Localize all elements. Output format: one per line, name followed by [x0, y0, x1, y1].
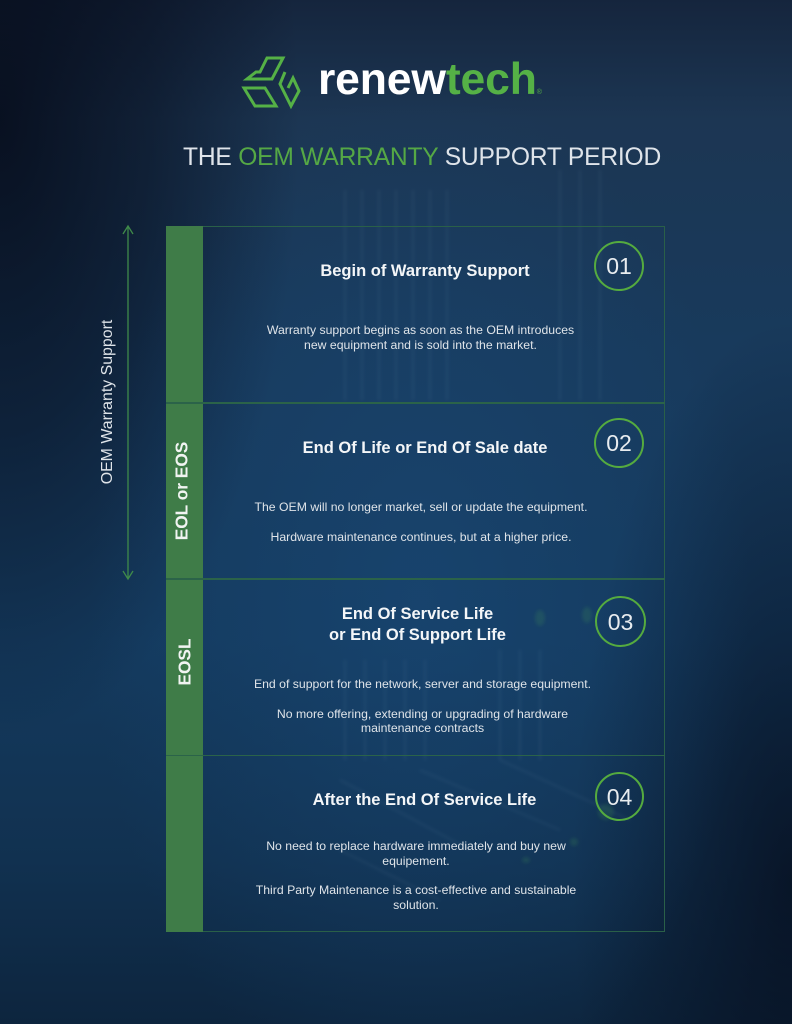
text 04: Third Party Maintenance is a cost-effective and sustainable [256, 883, 576, 897]
text 04: equipement. [382, 854, 450, 868]
number badge 01: 01 [606, 253, 632, 279]
heading 03 [329, 605, 506, 644]
text 03 [254, 677, 591, 735]
logo [241, 55, 542, 110]
panel: 01 begin of warranty support [266, 241, 644, 352]
text 01 [266, 323, 574, 352]
panel: 04 after end of service life [256, 772, 644, 912]
text 01: new equipment and is sold into the market. [304, 338, 537, 352]
number badge 02: 02 [606, 430, 632, 456]
text 03: No more offering, extending or upgrading of hardware [277, 707, 568, 721]
text 04 [256, 839, 576, 912]
number badge 03: 03 [608, 609, 633, 635]
title: THE OEM WARRANTY SUPPORT PERIOD [183, 144, 661, 171]
number badge 04 [595, 772, 644, 821]
text 02 [254, 500, 587, 544]
sidebar label: EOSL: EOSL [174, 638, 194, 686]
text 04: No need to replace hardware immediately and buy new [266, 839, 566, 853]
text 03: End of support for the network, server and storage equipment. [254, 677, 591, 691]
panel: green sidebar [166, 226, 203, 932]
label: OEM Warranty Support: OEM Warranty Support [99, 320, 116, 484]
heading 02: End Of Life or End Of Sale date [303, 439, 547, 457]
panel: 02 end of life [254, 418, 644, 544]
wordmark: renewtech® [318, 55, 542, 104]
heading 03: End Of Service Life [342, 605, 493, 623]
text 02: Hardware maintenance continues, but at a higher price. [270, 530, 571, 544]
panel: 03 end of service life [254, 596, 646, 735]
heading 03: or End Of Support Life [329, 626, 506, 644]
arrow: OEM warranty support span [122, 225, 134, 580]
sidebar label: EOL or EOS: EOL or EOS [172, 442, 192, 540]
text 04: solution. [393, 898, 439, 912]
heading 04: After the End Of Service Life [313, 791, 536, 809]
number badge 04: 04 [607, 784, 632, 810]
number badge 02 [594, 418, 644, 468]
text 02: The OEM will no longer market, sell or update the equipment. [255, 500, 587, 514]
number badge 03 [595, 596, 646, 647]
text 01: Warranty support begins as soon as the OEM introduces [267, 323, 574, 337]
heading 01: Begin of Warranty Support [320, 262, 530, 280]
table frame [166, 226, 665, 932]
icon: renewtech logo mark [241, 56, 301, 110]
number badge 01 [594, 241, 644, 291]
text 03: maintenance contracts [361, 721, 484, 735]
